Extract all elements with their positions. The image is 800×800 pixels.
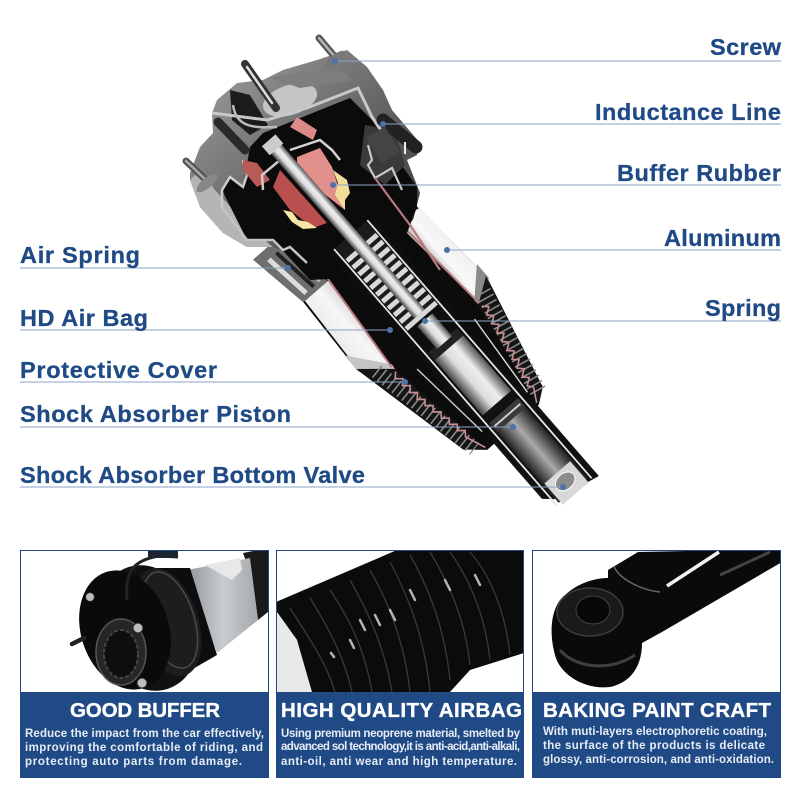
photo: airbag bbox=[276, 550, 524, 692]
caption bar bbox=[276, 692, 524, 778]
label: Shock Absorber Bottom Valve bbox=[20, 462, 566, 490]
description: With muti-layers electrophoretic coating, bbox=[543, 726, 767, 738]
panel: high quality airbag bbox=[276, 550, 524, 778]
rubber buffer parts bbox=[243, 117, 350, 229]
strut cutaway illustration bbox=[186, 38, 599, 514]
label: Inductance Line: Inductance Line bbox=[595, 99, 781, 125]
label: Screw bbox=[332, 34, 782, 64]
label: Air Spring bbox=[20, 242, 291, 271]
label: Shock Absorber Piston bbox=[20, 401, 516, 430]
label: HD Air Bag bbox=[20, 305, 393, 333]
label: Shock Absorber Piston: Shock Absorber Piston bbox=[20, 401, 291, 427]
photo: shock absorber bbox=[552, 549, 782, 687]
photo: strut top mount bbox=[70, 551, 268, 691]
outer sleeve and air bag bbox=[253, 151, 573, 484]
heading: GOOD BUFFER bbox=[70, 699, 220, 722]
label: Spring: Spring bbox=[705, 295, 781, 321]
description bbox=[543, 726, 774, 766]
description: Using premium neoprene material, smelted by bbox=[281, 728, 521, 740]
caption bar bbox=[532, 692, 781, 778]
description: improving the comfortable of riding, and bbox=[25, 742, 263, 754]
label: Aluminum: Aluminum bbox=[664, 225, 781, 251]
label: Buffer Rubber: Buffer Rubber bbox=[617, 160, 781, 186]
label: Screw: Screw bbox=[710, 34, 782, 60]
label: Inductance Line bbox=[380, 99, 781, 127]
label: Aluminum bbox=[444, 225, 781, 253]
caption bar bbox=[20, 692, 269, 778]
panel: good buffer bbox=[20, 548, 269, 778]
screws bbox=[186, 38, 348, 195]
label: HD Air Bag: HD Air Bag bbox=[20, 305, 148, 331]
inner tube, spring and rod bbox=[247, 121, 599, 514]
description: anti-oil, anti wear and high temperature. bbox=[281, 756, 517, 768]
heading: HIGH QUALITY AIRBAG bbox=[281, 699, 522, 722]
heading: BAKING PAINT CRAFT bbox=[543, 699, 771, 722]
description: glossy, anti-corrosion, and anti-oxidation. bbox=[543, 754, 774, 766]
description bbox=[25, 728, 264, 768]
label: Protective Cover: Protective Cover bbox=[20, 357, 217, 383]
label: Buffer Rubber bbox=[330, 160, 781, 188]
description: the surface of the products is delicate bbox=[543, 740, 765, 752]
panel: baking paint craft bbox=[532, 549, 782, 778]
top mount housing bbox=[190, 50, 443, 280]
label: Spring bbox=[422, 295, 781, 324]
description: Reduce the impact from the car effectively, bbox=[25, 728, 264, 740]
description: advanced sol technology,it is anti-acid,anti-alkali, bbox=[281, 741, 520, 753]
label: Protective Cover bbox=[20, 357, 408, 385]
description bbox=[281, 728, 521, 768]
description: protecting auto parts from damage. bbox=[25, 756, 242, 768]
label: Air Spring: Air Spring bbox=[20, 242, 140, 268]
label: Shock Absorber Bottom Valve: Shock Absorber Bottom Valve bbox=[20, 462, 365, 488]
